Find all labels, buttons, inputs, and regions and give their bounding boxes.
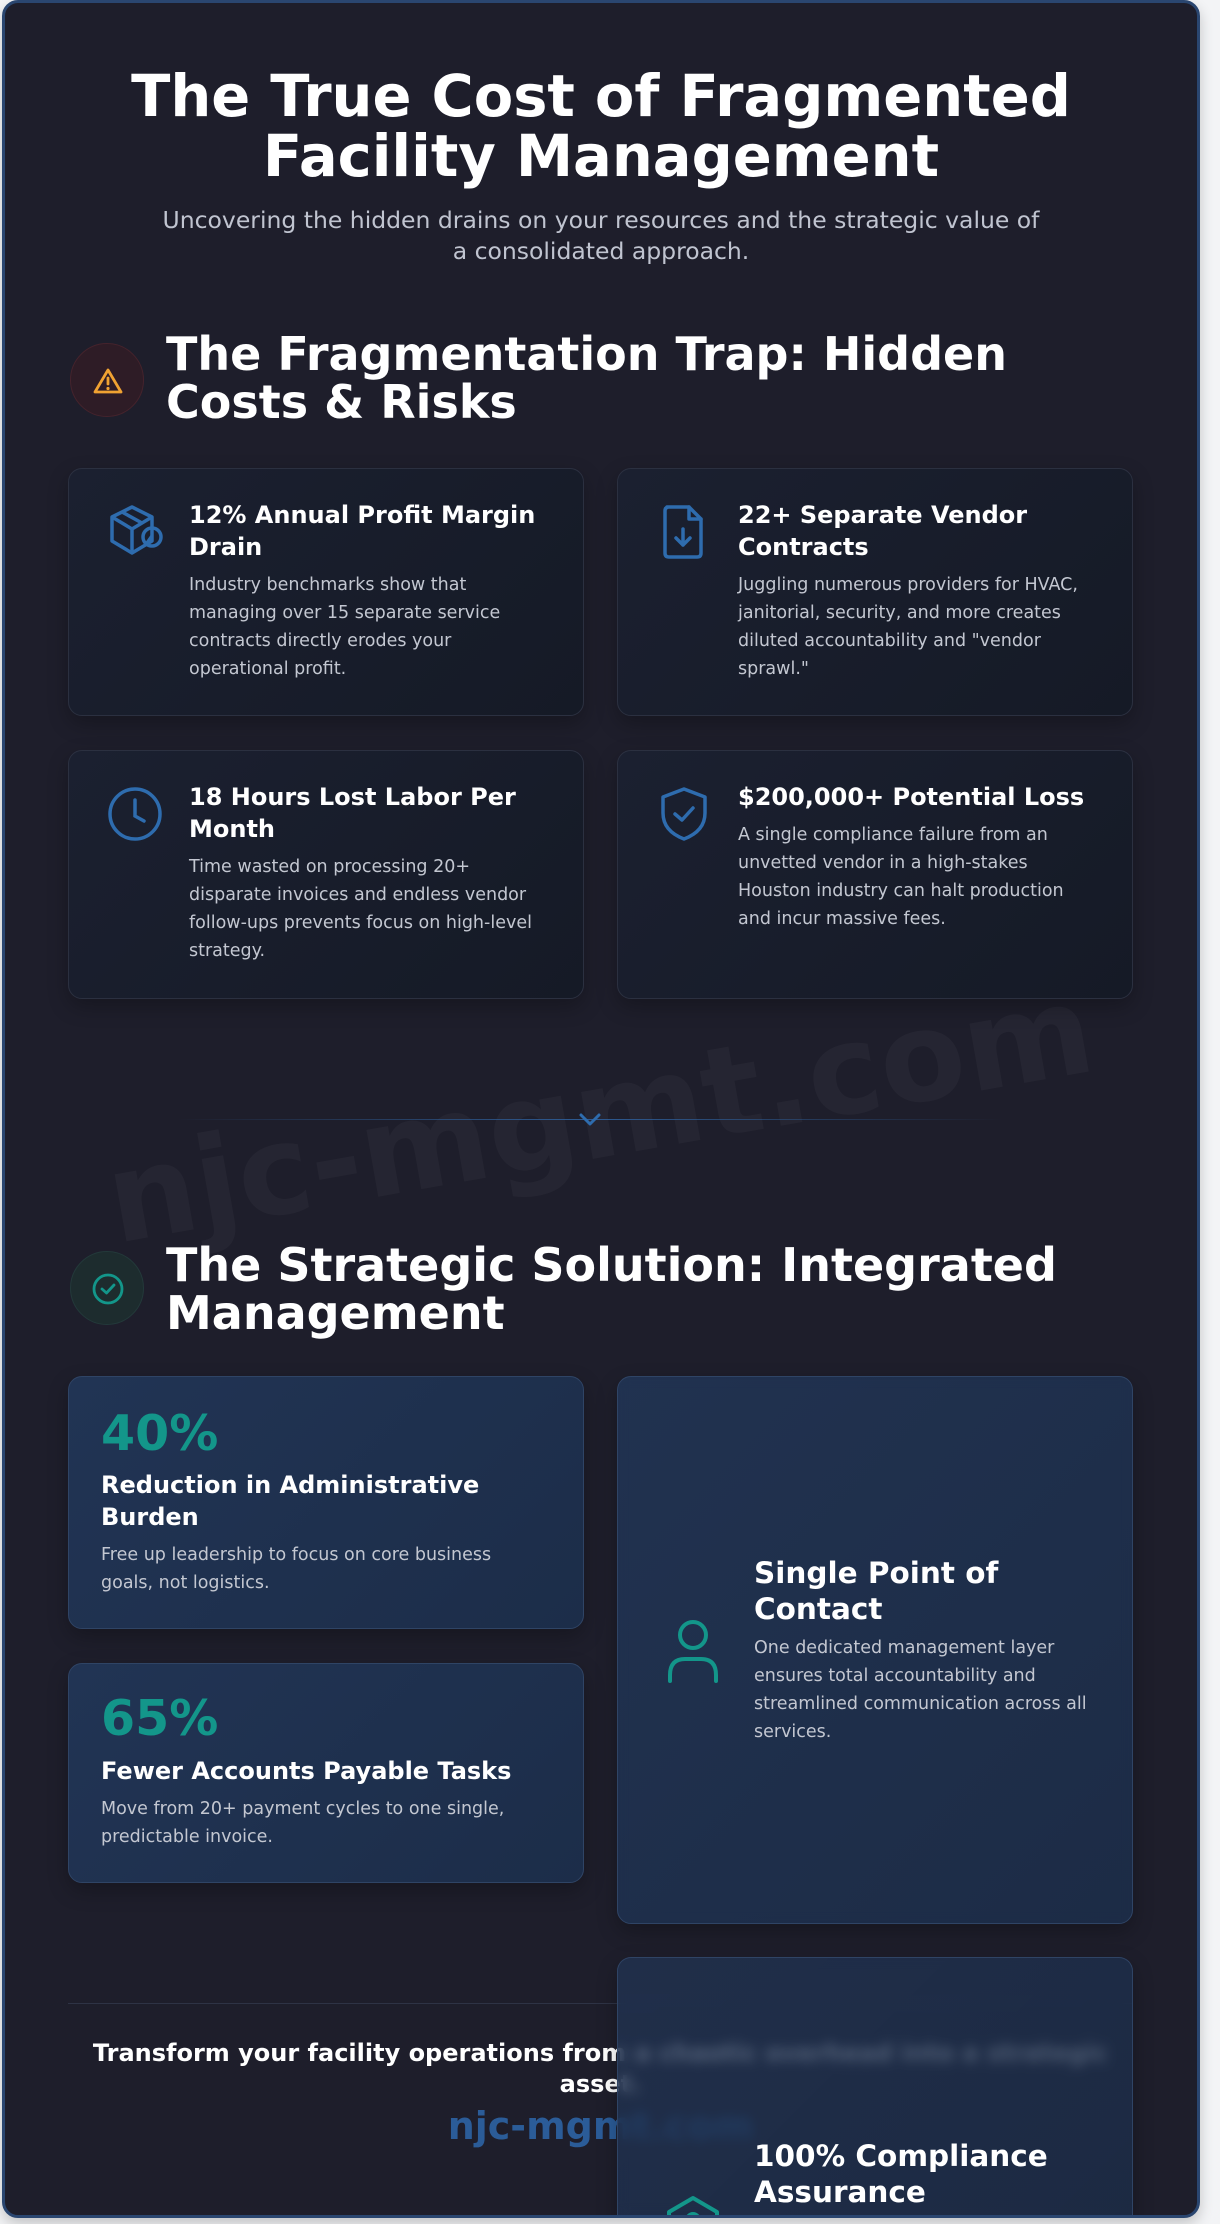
- section heading: strategic solution: [70, 1238, 1057, 1340]
- icon: shield: [661, 787, 707, 841]
- card: single point of contact: Single Point of Contact: [754, 1556, 998, 1626]
- card: single point of contact: [617, 1376, 1133, 1924]
- divider with chevron: [210, 1113, 969, 1126]
- card: potential loss: [617, 750, 1133, 999]
- card: 40%: Free up leadership to focus on core business goals, not logistics.: [101, 1545, 491, 1593]
- footer url: njc-mgmt.com: [448, 2104, 753, 2148]
- card: lost labor: 18 Hours Lost Labor Per Month: [189, 783, 516, 843]
- card: potential loss: A single compliance failure from an unvetted vendor in a high-stakes Houston industry can halt production and incur massive fees.: [738, 825, 1064, 929]
- title: Facility Management: [263, 123, 939, 190]
- icon: box: [110, 505, 163, 555]
- card: compliance assurance: [617, 1957, 1133, 2224]
- title: The True Cost of Fragmented: [131, 63, 1071, 130]
- card: 65%: 65%: [101, 1690, 218, 1747]
- footer text: Transform your facility operations from a chaotic overhead into a strategic asset.: [93, 2039, 1108, 2098]
- card: vendor contracts: Juggling numerous providers for HVAC, janitorial, security, and more creates diluted accountability and "vendor sprawl.": [738, 575, 1078, 679]
- icon: person: [668, 1620, 718, 1683]
- card: 65%: Fewer Accounts Payable Tasks: [101, 1757, 511, 1785]
- card: profit drain: [68, 468, 584, 716]
- watermark: njc-mgmt.com: [96, 958, 1104, 1272]
- card: 40%: [68, 1376, 584, 1629]
- footer: [68, 2003, 1108, 2148]
- icon: check circle: [70, 1251, 144, 1325]
- card: profit drain: Industry benchmarks show that managing over 15 separate service contracts directly erodes your operational profit.: [189, 575, 500, 679]
- card: 40%: Reduction in Administrative Burden: [101, 1471, 479, 1531]
- icon: warning: [70, 343, 144, 417]
- card: 65%: Move from 20+ payment cycles to one single, predictable invoice.: [101, 1799, 504, 1847]
- card: single point of contact: One dedicated management layer ensures total accountability and streamlined communication across all services.: [754, 1638, 1087, 1742]
- heading text: The Strategic Solution: Integrated Management: [166, 1238, 1057, 1340]
- card: potential loss: $200,000+ Potential Loss: [738, 783, 1084, 811]
- title: [131, 63, 1071, 190]
- card: vendor contracts: 22+ Separate Vendor Contracts: [738, 501, 1027, 561]
- card: profit drain: 12% Annual Profit Margin Drain: [189, 501, 535, 561]
- subtitle: Uncovering the hidden drains on your resources and the strategic value of a consolidated approach.: [163, 206, 1039, 265]
- card: 65%: [68, 1663, 584, 1883]
- icon: shield home: [667, 2196, 719, 2215]
- icon: file: [663, 505, 703, 559]
- icon: clock: [108, 787, 162, 841]
- heading text: The Fragmentation Trap: Hidden Costs & Risks: [166, 327, 1007, 429]
- card: vendor contracts: [617, 468, 1133, 716]
- card: lost labor: [68, 750, 584, 999]
- icon: chevron: [579, 1113, 600, 1126]
- section heading: fragmentation trap: [70, 327, 1007, 429]
- card: 40%: 40%: [101, 1405, 218, 1462]
- card: compliance assurance: 100% Compliance Assurance: [754, 2139, 1048, 2209]
- card: lost labor: Time wasted on processing 20+ disparate invoices and endless vendor follow-ups prevents focus on high-level strategy.: [189, 857, 532, 961]
